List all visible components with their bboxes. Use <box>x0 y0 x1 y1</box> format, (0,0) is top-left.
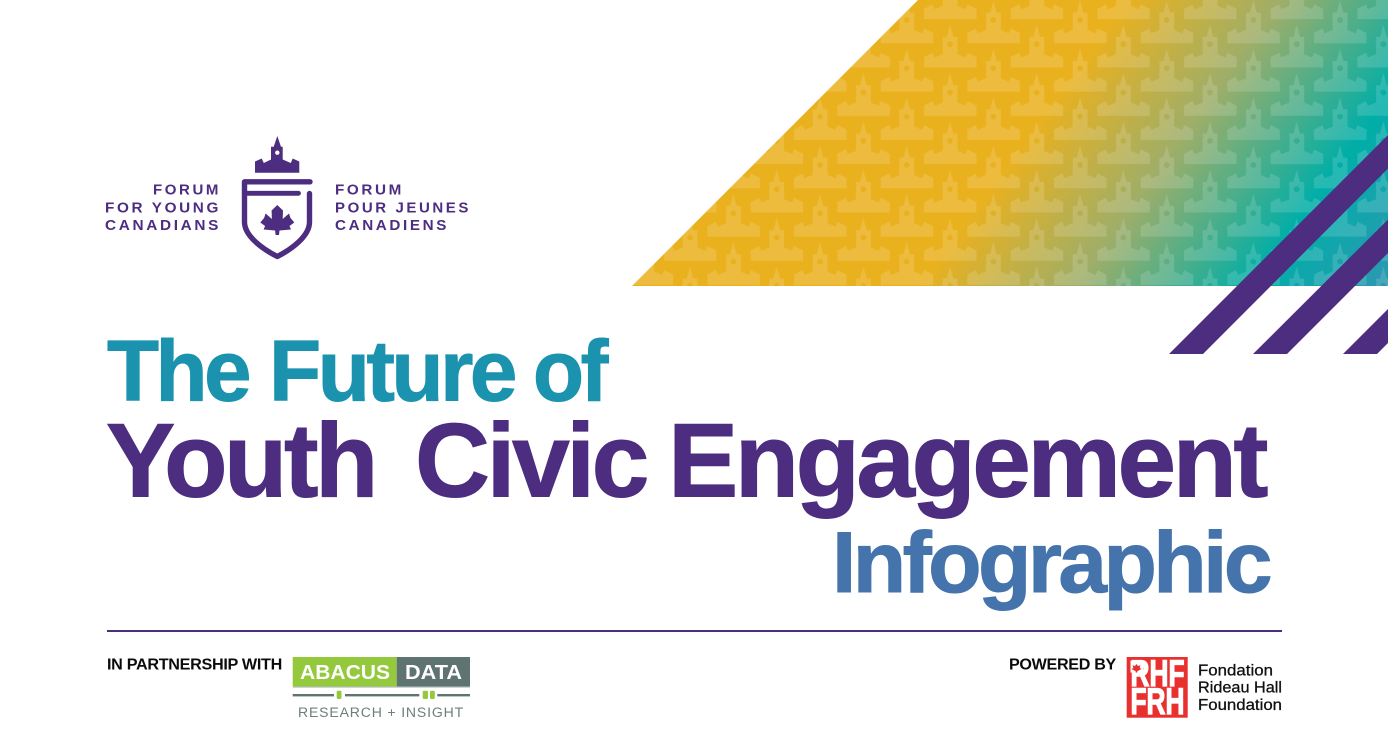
powered by label: POWERED BY <box>1009 656 1117 674</box>
logo: Abacus Data <box>293 657 470 720</box>
logo: Rideau Hall Foundation <box>1127 653 1282 722</box>
logo text: English: FORUM <box>153 182 221 198</box>
purple diagonal stripes <box>1169 135 1388 354</box>
logo: Forum for Young Canadians <box>105 136 471 256</box>
logo: Rideau Hall Foundation: Fondation <box>1198 663 1273 680</box>
title line 1: Future <box>269 324 515 420</box>
logo text: English: CANADIANS <box>105 218 221 234</box>
banner: gradient parliament pattern <box>632 0 1388 286</box>
logo crest: crown and shield <box>244 136 310 256</box>
logo text: French <box>335 182 471 234</box>
logo: Rideau Hall Foundation: FRH <box>1130 681 1184 722</box>
logo: Rideau Hall Foundation: Foundation <box>1198 697 1282 714</box>
title line 2 <box>106 402 1268 520</box>
title <box>106 324 1271 611</box>
title line 1 <box>107 324 609 420</box>
title line 2: Engagement <box>668 402 1268 520</box>
logo: Rideau Hall Foundation: RHF <box>1130 653 1184 694</box>
title line 3: Infographic <box>832 515 1271 611</box>
logo: Abacus Data: ABACUS <box>300 662 390 684</box>
logo text: French: CANADIENS <box>335 218 449 234</box>
title line 1: The <box>107 324 249 420</box>
title line 1: of <box>533 324 609 420</box>
logo: Abacus Data: RESEARCH + INSIGHT <box>298 705 464 720</box>
logo text: English <box>105 182 221 234</box>
logo text: English: FOR YOUNG <box>105 200 221 216</box>
logo text: French: POUR JEUNES <box>335 200 471 216</box>
logo text: French: FORUM <box>335 182 404 198</box>
title line 2: Civic <box>415 402 647 520</box>
title line 2: Youth <box>106 402 375 520</box>
partnership label: IN PARTNERSHIP WITH <box>107 656 282 674</box>
logo: Abacus Data: DATA <box>405 662 462 684</box>
logo: Rideau Hall Foundation: Rideau Hall <box>1198 680 1282 697</box>
